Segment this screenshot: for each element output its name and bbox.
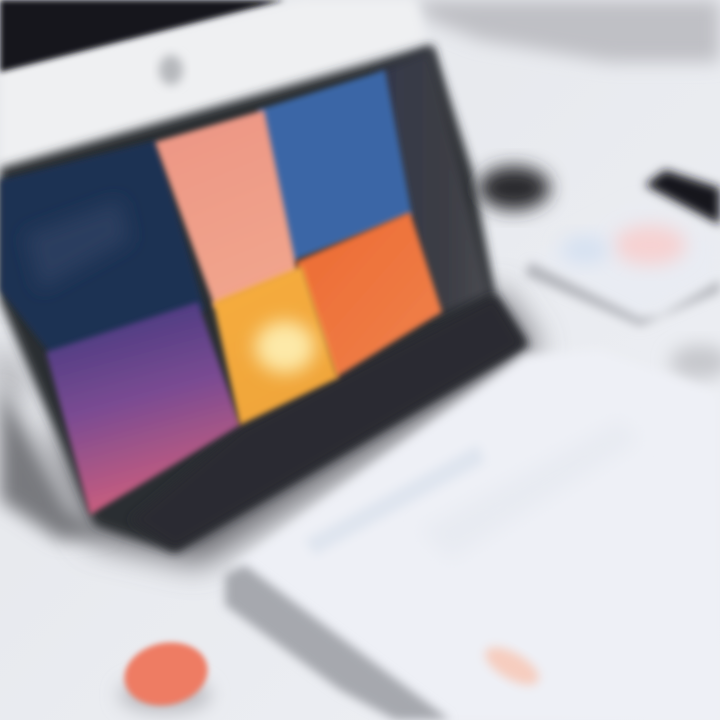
panel: navy text blur	[25, 200, 130, 290]
panel: purple gradient	[46, 302, 240, 515]
document	[225, 350, 720, 720]
small grey object	[670, 345, 720, 379]
monitor bezel	[0, 0, 425, 175]
shadow beneath tablet	[0, 290, 540, 565]
panel: blue	[258, 70, 412, 262]
black pen	[645, 170, 720, 225]
tablet stand edge	[130, 295, 525, 550]
notepad	[530, 205, 720, 320]
monitor stand and top right blur	[415, 0, 720, 62]
button shadow	[119, 677, 211, 713]
panel: yellow	[213, 266, 338, 425]
panel: navy	[0, 140, 205, 360]
panel: orange	[296, 212, 442, 378]
panel: salmon	[155, 110, 298, 308]
document page	[235, 350, 720, 720]
notepad edge	[525, 262, 720, 326]
dark clip	[478, 166, 550, 210]
document text lines	[420, 420, 640, 560]
document heading blur	[305, 445, 485, 555]
monitor logo	[159, 55, 183, 85]
tablet frame	[0, 45, 528, 552]
document orange text	[480, 640, 544, 692]
notepad blue tint	[561, 236, 609, 264]
notepad pink tint	[614, 225, 686, 265]
document edge	[225, 565, 450, 720]
right-side desk objects	[478, 166, 720, 379]
tablet right bezel	[375, 48, 490, 318]
orange button	[118, 635, 214, 713]
monitor	[0, 0, 720, 175]
tablet	[0, 45, 528, 552]
screen glow	[255, 321, 315, 373]
monitor screen	[0, 0, 285, 72]
button	[118, 635, 214, 713]
